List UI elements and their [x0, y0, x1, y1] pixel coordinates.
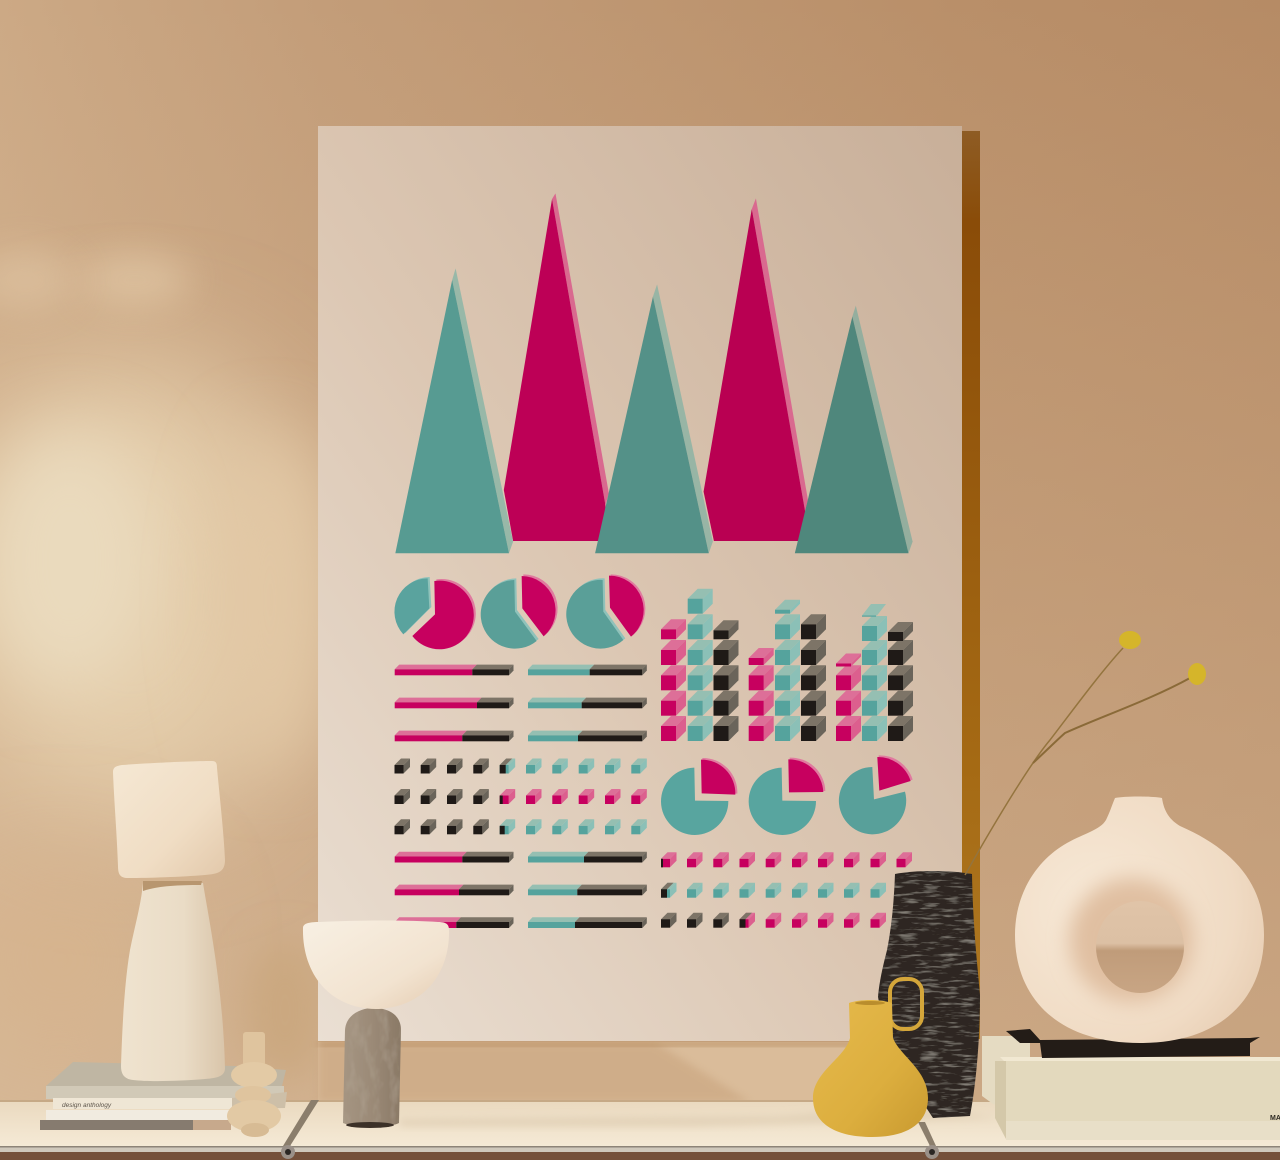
vase opening [1096, 901, 1184, 993]
stack group 3 [836, 604, 913, 741]
marble bowl lamp [303, 920, 449, 1128]
tall stone vase [113, 761, 225, 1081]
black tray [1006, 1029, 1260, 1058]
row 2 [394, 789, 647, 804]
pie 2 [481, 574, 558, 649]
pink triangle 1 [504, 193, 609, 541]
cream donut vase [1015, 796, 1264, 1043]
pie 6 [839, 755, 913, 834]
yellow vase [813, 979, 928, 1137]
progress bars group 2 [395, 852, 647, 928]
triangle chart [395, 193, 913, 553]
progress bars group 1 [395, 665, 647, 741]
black textured vase [878, 871, 980, 1118]
pie charts row 2 [661, 755, 913, 835]
poster orange side edge [962, 131, 980, 1039]
stack group 2 [749, 600, 826, 741]
stack of books [40, 1062, 287, 1130]
row 4 [661, 852, 912, 867]
row 6 [661, 913, 886, 928]
pink triangle 2 [704, 198, 808, 541]
stem with yellow flowers [965, 631, 1206, 875]
teal triangle 3 [795, 306, 913, 553]
row 5 [661, 883, 886, 898]
isometric stacked bar chart [661, 589, 913, 741]
small block rows left [394, 758, 647, 834]
pie 3 [566, 574, 645, 649]
row 3 [394, 819, 647, 834]
book spine text: design anthology [62, 1102, 112, 1109]
teal triangle 1 [395, 268, 513, 553]
small block rows right [661, 852, 912, 928]
stack group 1 [661, 589, 738, 741]
pie 5 [749, 758, 825, 835]
small beige bead vase [227, 1032, 281, 1137]
teal triangle 2 [595, 284, 713, 553]
row 1 [394, 758, 647, 774]
pie charts row 1 [394, 574, 645, 649]
poster [318, 126, 962, 1041]
pie 1 [394, 577, 476, 649]
stacked boxes [982, 1036, 1280, 1140]
shelf [0, 1100, 1280, 1160]
pie 4 [661, 758, 737, 835]
